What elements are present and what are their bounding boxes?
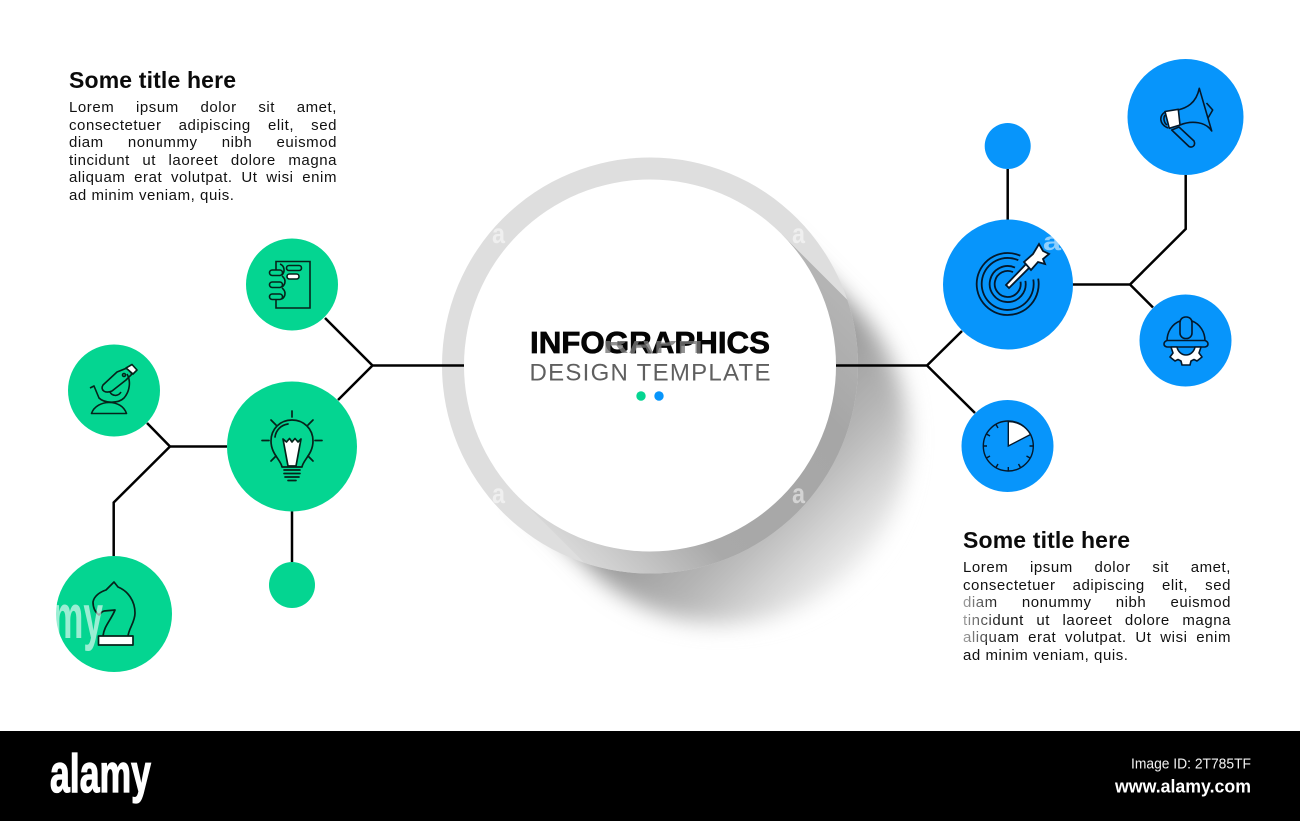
watermark letter: a: [1043, 226, 1062, 256]
image id: Image ID: 2T785TF: [1131, 756, 1251, 772]
body copy: bottom right: diam nonummy nibh euismod: [963, 594, 1231, 611]
central subheading: DESIGN TEMPLATE: [530, 360, 770, 386]
body copy: bottom right: consectetuer adipiscing elit, sed: [963, 577, 1231, 594]
ring shadow: [549, 234, 858, 574]
alamy logo: alamy: [50, 744, 151, 804]
clock node: [962, 400, 1054, 492]
green dot: [636, 391, 646, 401]
icon: target with dart: [977, 244, 1049, 315]
body copy: top left: diam nonummy nibh euismod: [69, 134, 337, 151]
icon: lightbulb: [262, 411, 322, 480]
icon: chess knight: [93, 582, 135, 645]
left branch: [52, 238, 464, 672]
body copy: top left: Lorem ipsum dolor sit amet,: [69, 99, 337, 116]
small blue dot: [985, 123, 1031, 169]
icon: megaphone: [1161, 88, 1213, 147]
ring watermarks: [492, 218, 805, 509]
helmet and gear node: [1140, 294, 1232, 386]
heading: bottom right title: Some title here: [963, 527, 1130, 553]
body copy: bottom right: Lorem ipsum dolor sit amet,: [963, 559, 1231, 576]
icon: clock: [983, 421, 1033, 471]
body copy: bottom right: aliquam erat volutpat. Ut wisi enim: [963, 629, 1231, 646]
body copy: bottom right: [963, 559, 1231, 664]
icon: microscope: [90, 364, 137, 414]
body copy: bottom right: tincidunt ut laoreet dolore magna: [963, 612, 1231, 629]
small green dot: [269, 562, 315, 608]
right branch: [836, 59, 1244, 492]
ring watermarks: a: [792, 218, 805, 249]
ring watermarks: a: [492, 478, 505, 509]
watermark over heading: RAPH: [603, 327, 703, 360]
body copy: top left: ad minim veniam, quis.: [69, 187, 234, 204]
body copy: top left: aliquam erat volutpat. Ut wisi enim: [69, 169, 337, 186]
blue dot: [654, 391, 664, 401]
footer bar: [0, 731, 1300, 821]
watermark fade over body copy: [963, 592, 1001, 642]
ring watermarks: a: [492, 218, 505, 249]
chess knight node: [52, 556, 172, 672]
soft long shadow: [518, 234, 909, 624]
website: www.alamy.com: [1114, 776, 1251, 796]
white inner disc: [464, 180, 836, 552]
heading: top left title: Some title here: [69, 67, 236, 93]
microscope node: [68, 344, 160, 436]
ring watermarks: a: [792, 478, 805, 509]
icon: notebook: [270, 262, 310, 308]
text block: bottom right: [963, 527, 1231, 664]
notebook node: [246, 238, 338, 330]
text block: top left: [69, 67, 337, 204]
megaphone node: [1128, 59, 1244, 175]
body copy: top left: [69, 99, 337, 204]
central heading: INFOGRAPHICS: [530, 326, 770, 360]
connector lines: [836, 169, 1186, 413]
lightbulb node: [227, 382, 357, 512]
body copy: top left: tincidunt ut laoreet dolore magna: [69, 152, 337, 169]
connector lines: [114, 318, 464, 562]
central circle: [442, 158, 909, 624]
body copy: top left: consectetuer adipiscing elit, sed: [69, 117, 337, 134]
outer grey ring: [442, 158, 858, 574]
target node: [943, 220, 1073, 350]
body copy: bottom right: ad minim veniam, quis.: [963, 647, 1128, 664]
watermark letters: my: [52, 583, 103, 652]
icon: helmet with gear: [1164, 317, 1208, 365]
